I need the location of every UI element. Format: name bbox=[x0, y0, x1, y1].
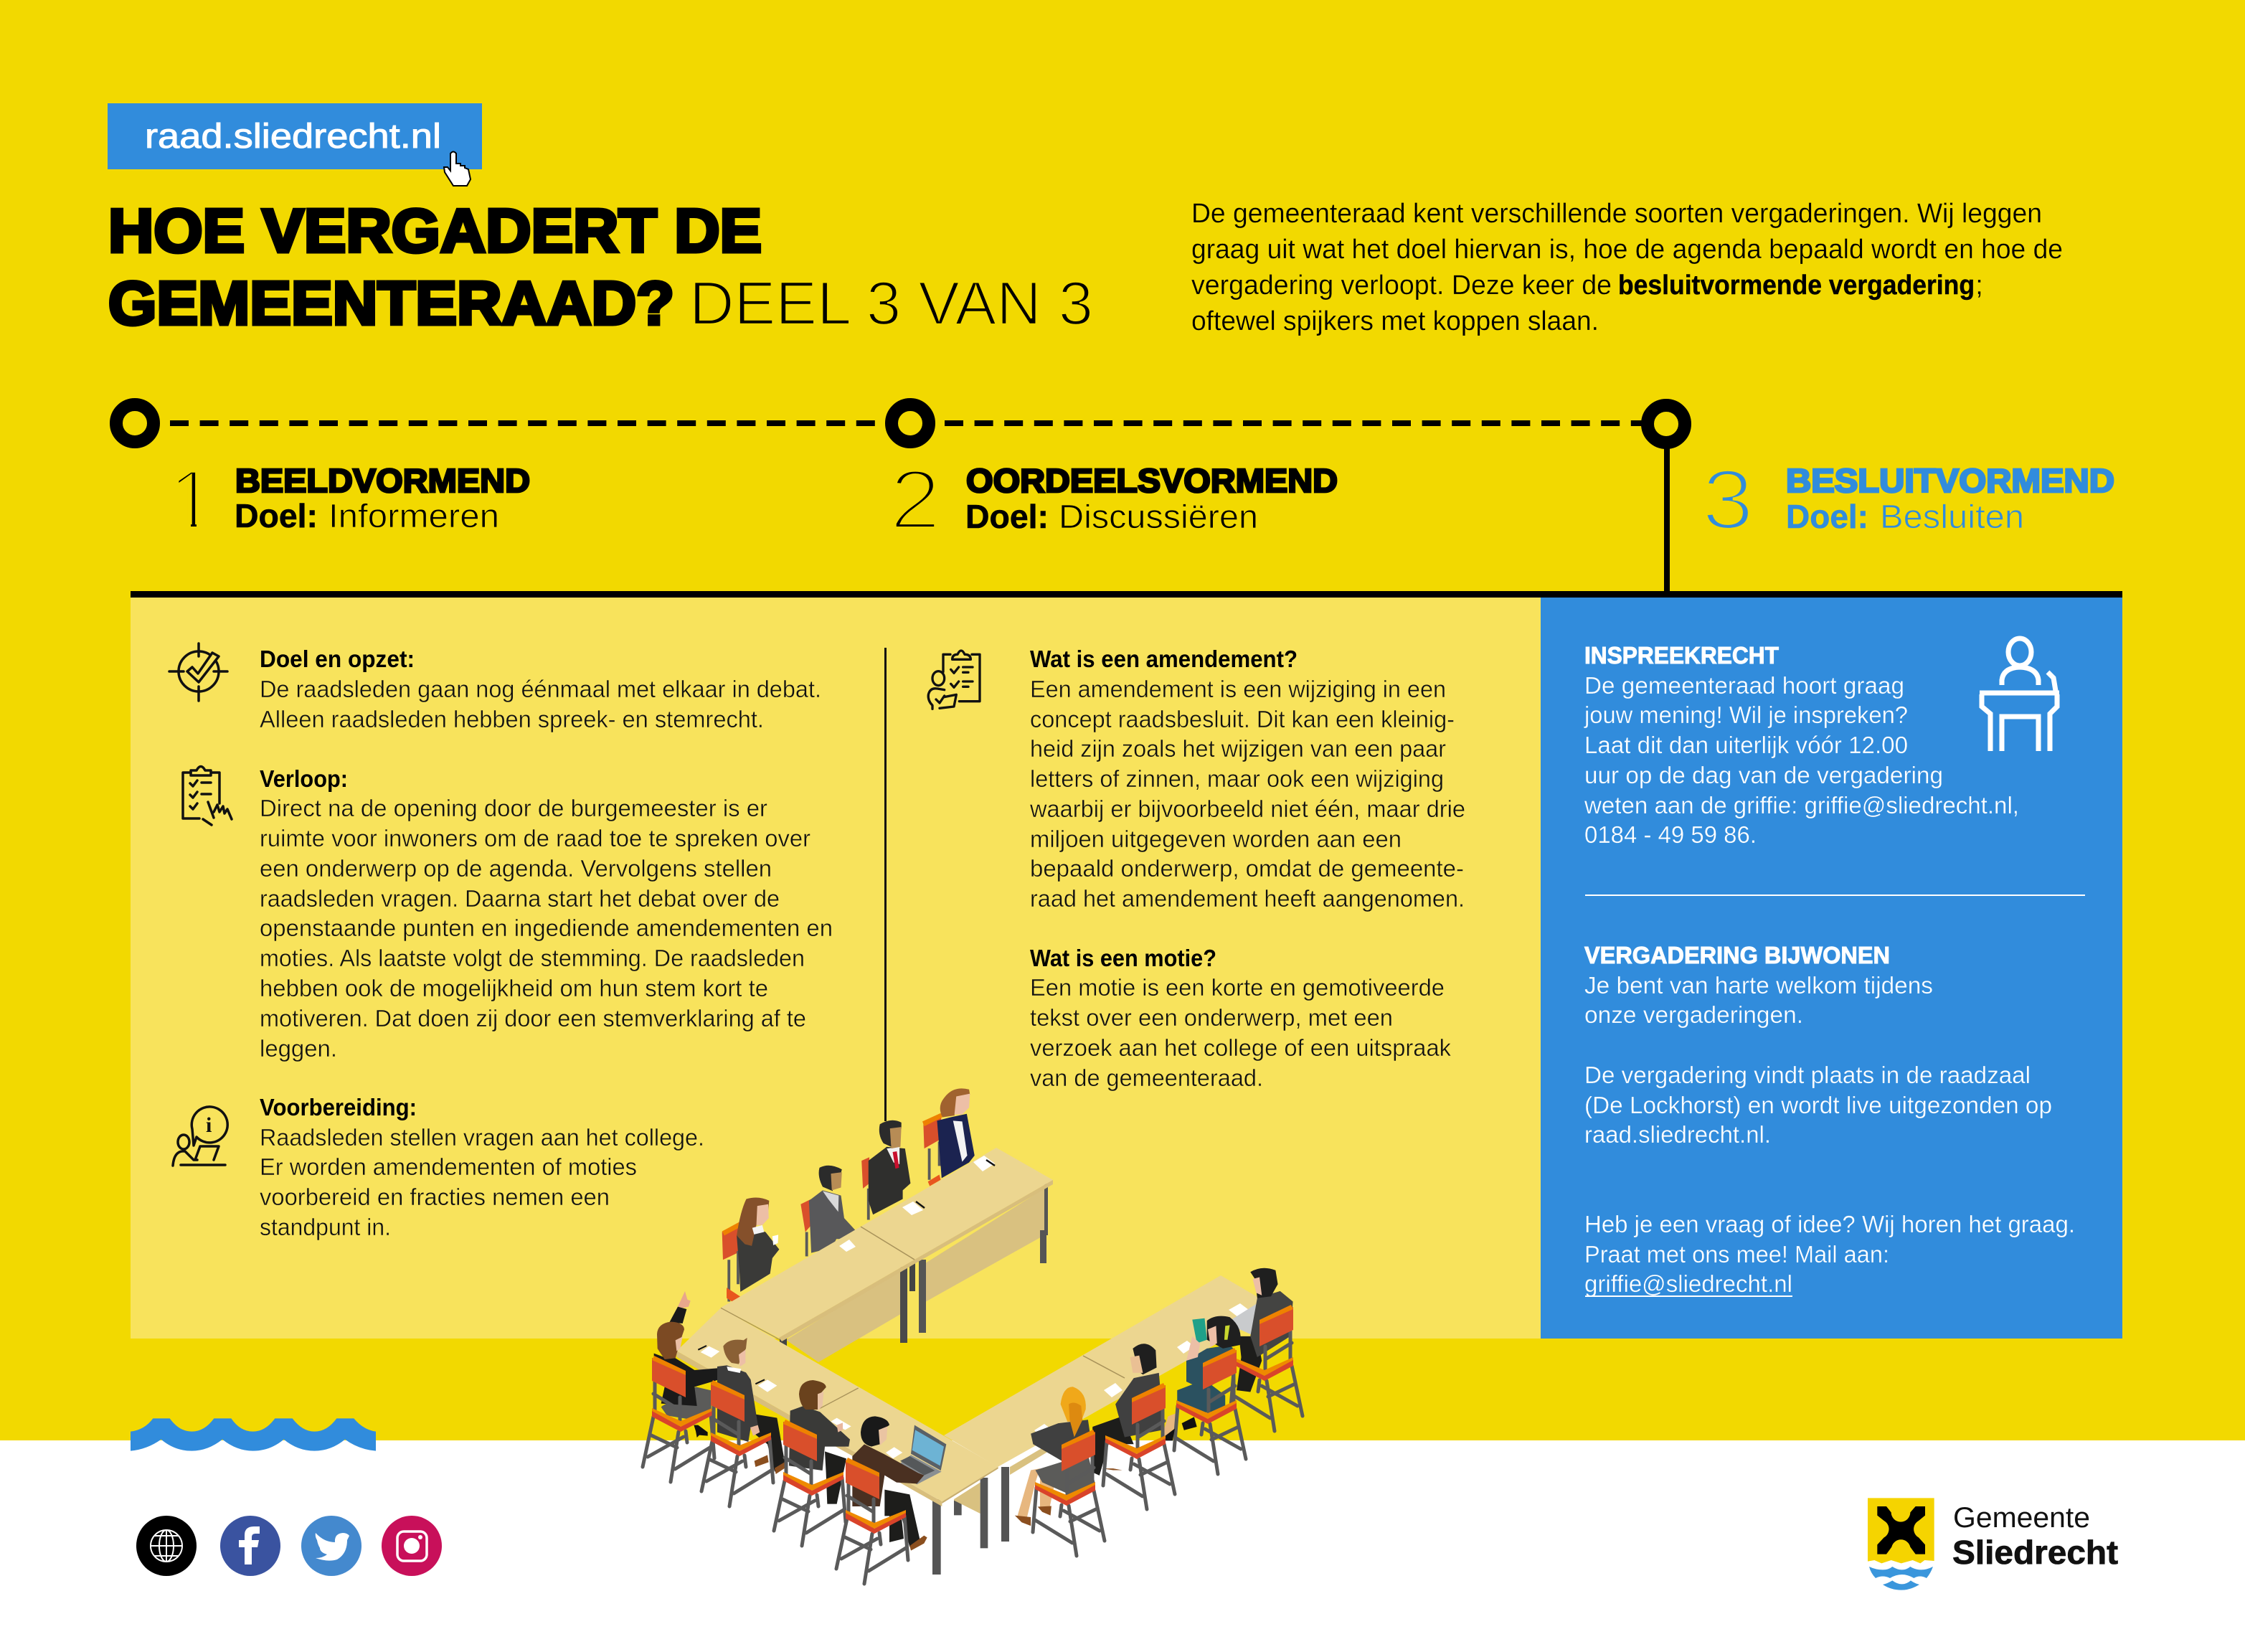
text block: voorbereiding bbox=[260, 1094, 704, 1240]
step 3 label: Besluiten bbox=[1880, 498, 2024, 535]
left person 4 with laptop bbox=[852, 1416, 927, 1551]
text block: inspreekrecht bbox=[1584, 642, 2019, 848]
text block: vergadering bijwonen: VERGADERING BIJWONEN bbox=[1584, 942, 1890, 968]
right person black hair bbox=[1092, 1344, 1175, 1476]
text block: voorbereiding: Voorbereiding: bbox=[260, 1094, 417, 1120]
text block: motie: van de gemeenteraad. bbox=[1030, 1065, 1263, 1091]
icon: clipboard person bbox=[928, 651, 980, 709]
step 1 label: Informeren bbox=[329, 497, 499, 534]
step 1 label: Doel: bbox=[235, 497, 318, 534]
back tables bbox=[721, 1148, 1053, 1362]
logo wordmark: Gemeente bbox=[1953, 1502, 2090, 1534]
left table bbox=[676, 1308, 998, 1575]
logo wordmark: Sliedrecht bbox=[1952, 1534, 2118, 1571]
icon: website bbox=[136, 1516, 197, 1576]
step 3 label: Doel: bbox=[1786, 498, 1868, 535]
left person 1 raised hand bbox=[654, 1291, 717, 1438]
text block: verloop bbox=[260, 765, 833, 1062]
text block: verloop: een onderwerp op de agenda. Vervolgens stellen bbox=[260, 855, 772, 882]
text block: motie bbox=[1030, 945, 1451, 1091]
intro text: De gemeenteraad kent verschillende soorten vergaderingen. Wij leggen bbox=[1191, 199, 2042, 229]
intro text: ; bbox=[1975, 270, 1983, 301]
text block: vergadering bijwonen bbox=[1584, 942, 2052, 1148]
text block: inspreekrecht: Laat dit dan uiterlijk vóór 12.00 bbox=[1584, 732, 1908, 758]
right person teal bbox=[1161, 1316, 1241, 1439]
chair and person 3 bbox=[861, 1120, 910, 1220]
text block: contact bbox=[1584, 1211, 2075, 1297]
text block: contact: Heb je een vraag of idee? Wij horen het graag. bbox=[1584, 1211, 2075, 1237]
chair right 4 bbox=[1231, 1305, 1303, 1431]
text block: amendement: concept raadsbesluit. Dit kan een kleinig- bbox=[1030, 706, 1455, 732]
chair right 3 bbox=[1174, 1348, 1246, 1474]
text block: voorbereiding: voorbereid en fracties nemen een bbox=[260, 1184, 610, 1210]
intro text bbox=[1191, 199, 2063, 336]
text block: contact: Praat met ons mee! Mail aan: bbox=[1584, 1241, 1889, 1268]
text block: verloop: Verloop: bbox=[260, 765, 348, 792]
text block: amendement: heid zijn zoals het wijzigen van een paar bbox=[1030, 735, 1446, 762]
icon: hand cursor bbox=[444, 152, 471, 186]
text block: vergadering bijwonen: raad.sliedrecht.nl. bbox=[1584, 1121, 1771, 1148]
step 1 label: BEELDVORMEND bbox=[235, 462, 530, 499]
text block: vergadering bijwonen: De vergadering vindt plaats in de raadzaal bbox=[1584, 1062, 2031, 1088]
text block: vergadering bijwonen: Je bent van harte welkom tijdens bbox=[1584, 972, 1933, 999]
text block: verloop: Direct na de opening door de burgemeester is er bbox=[260, 795, 767, 821]
text block: doel en opzet: Alleen raadsleden hebben spreek- en stemrecht. bbox=[260, 706, 764, 732]
title bbox=[108, 197, 1093, 338]
text block: amendement: raad het amendement heeft aangenomen. bbox=[1030, 885, 1465, 912]
intro text: besluitvormende vergadering bbox=[1618, 270, 1975, 301]
logo shield bbox=[1868, 1498, 1934, 1590]
text block: inspreekrecht: INSPREEKRECHT bbox=[1584, 642, 1779, 669]
step 2 label: Discussiëren bbox=[1059, 498, 1258, 535]
step 2 label: 2 bbox=[889, 453, 941, 547]
title: DEEL 3 VAN 3 bbox=[689, 270, 1093, 338]
text block: verloop: moties. Als laatste volgt de stemming. De raadsleden bbox=[260, 945, 805, 971]
icon: info person laptop: i bbox=[206, 1113, 212, 1137]
step 1 label bbox=[169, 453, 530, 547]
text block: inspreekrecht: jouw mening! Wil je inspreken? bbox=[1584, 702, 1908, 728]
text block: inspreekrecht: De gemeenteraad hoort graag bbox=[1584, 672, 1904, 699]
back row people and chairs bbox=[722, 1088, 975, 1303]
text block: motie: verzoek aan het college of een uitspraak bbox=[1030, 1034, 1451, 1061]
icon: twitter bbox=[301, 1516, 361, 1576]
icon: facebook bbox=[220, 1516, 280, 1576]
timeline bbox=[116, 405, 1685, 592]
text block: doel en opzet bbox=[260, 646, 821, 732]
chair and person 1 bbox=[722, 1198, 779, 1303]
chair right 2 bbox=[1103, 1383, 1175, 1509]
chair and person 2 bbox=[800, 1166, 857, 1256]
right person blonde bbox=[1015, 1387, 1095, 1526]
panel: blue sidebar bbox=[1541, 597, 2122, 1339]
step 3 label bbox=[1702, 453, 2114, 547]
text block: doel en opzet: Doel en opzet: bbox=[260, 646, 415, 672]
chair 1 bbox=[643, 1356, 714, 1482]
text block: amendement: waarbij er bijvoorbeeld niet één, maar drie bbox=[1029, 796, 1465, 822]
right table bbox=[944, 1275, 1278, 1542]
illustration: council meeting bbox=[643, 1088, 1303, 1584]
text block: motie: Wat is een motie? bbox=[1030, 945, 1216, 971]
intro text: graag uit wat het doel hiervan is, hoe de agenda bepaald wordt en hoe de bbox=[1191, 235, 2063, 265]
chair 4 bbox=[836, 1458, 908, 1584]
text block: amendement: Een amendement is een wijziging in een bbox=[1030, 676, 1446, 702]
url button bbox=[108, 103, 482, 169]
step 3 label: BESLUITVORMEND bbox=[1786, 462, 2114, 499]
text block: inspreekrecht: uur op de dag van de vergadering bbox=[1584, 762, 1943, 788]
left person 2 bbox=[717, 1338, 787, 1474]
step 2 label bbox=[889, 453, 1338, 547]
column divider bbox=[884, 648, 887, 1121]
step 1 label: 1 bbox=[169, 453, 216, 547]
text block: inspreekrecht: 0184 - 49 59 86. bbox=[1584, 821, 1757, 848]
text block: motie: tekst over een onderwerp, met een bbox=[1030, 1004, 1393, 1031]
text block: amendement: miljoen uitgegeven worden aan een bbox=[1030, 826, 1402, 852]
intro text: oftewel spijkers met koppen slaan. bbox=[1191, 306, 1599, 336]
text block: verloop: motiveren. Dat doen zij door een stemverklaring af te bbox=[260, 1005, 806, 1032]
chair right 1 bbox=[1033, 1430, 1105, 1556]
text block: contact: griffie@sliedrecht.nl bbox=[1584, 1270, 1792, 1297]
text block: voorbereiding: Er worden amendementen of moties bbox=[260, 1153, 637, 1180]
text block: amendement: Wat is een amendement? bbox=[1030, 646, 1298, 672]
black rule bbox=[131, 591, 2122, 598]
right person far bbox=[1230, 1268, 1293, 1392]
step 3 label: 3 bbox=[1702, 453, 1754, 547]
text block: verloop: ruimte voor inwoners om de raad toe te spreken over bbox=[260, 825, 810, 851]
text block: motie: Een motie is een korte en gemotiveerde bbox=[1030, 974, 1445, 1001]
icon: instagram bbox=[382, 1516, 442, 1576]
url button: raad.sliedrecht.nl bbox=[145, 118, 441, 156]
left person 3 bbox=[789, 1380, 850, 1504]
text block: vergadering bijwonen: onze vergaderingen. bbox=[1584, 1001, 1803, 1028]
panel: light yellow content bbox=[131, 597, 1541, 1339]
text block: verloop: hebben ook de mogelijkheid om hun stem kort te bbox=[260, 975, 768, 1001]
text block: amendement bbox=[1029, 646, 1465, 912]
chair 3 bbox=[774, 1420, 846, 1546]
wave decoration bbox=[131, 1418, 376, 1451]
text block: doel en opzet: De raadsleden gaan nog éénmaal met elkaar in debat. bbox=[260, 676, 821, 702]
logo wordmark bbox=[1952, 1502, 2118, 1571]
logo: gemeente sliedrecht bbox=[1868, 1498, 2118, 1590]
text block: verloop: openstaande punten en ingediende amendementen en bbox=[260, 915, 833, 941]
icon: clipboard hand bbox=[183, 766, 232, 825]
chair 2 bbox=[701, 1380, 773, 1506]
intro text: vergadering verloopt. Deze keer de bbox=[1191, 270, 1612, 301]
text block: vergadering bijwonen: (De Lockhorst) en wordt live uitgezonden op bbox=[1584, 1092, 2052, 1118]
text block: amendement: bepaald onderwerp, omdat de gemeente- bbox=[1030, 855, 1464, 882]
chair and person 4 bbox=[922, 1088, 975, 1186]
text block: verloop: raadsleden vragen. Daarna start het debat over de bbox=[260, 885, 780, 912]
step 2 label: OORDEELSVORMEND bbox=[966, 462, 1338, 499]
text block: amendement: letters of zinnen, maar ook een wijziging bbox=[1030, 765, 1444, 792]
title: GEMEENTERAAD? bbox=[108, 270, 674, 338]
text block: inspreekrecht: weten aan de griffie: griffie@sliedrecht.nl, bbox=[1584, 792, 2019, 818]
text block: voorbereiding: Raadsleden stellen vragen aan het college. bbox=[260, 1124, 704, 1151]
icon: target check bbox=[169, 643, 227, 701]
sidebar divider bbox=[1585, 895, 2085, 896]
text block: voorbereiding: standpunt in. bbox=[260, 1214, 391, 1240]
text block: verloop: leggen. bbox=[260, 1035, 337, 1062]
title: HOE VERGADERT DE bbox=[108, 197, 762, 265]
icon: speaker at lectern bbox=[1980, 638, 2059, 751]
step 2 label: Doel: bbox=[965, 498, 1049, 535]
icon: info person laptop bbox=[173, 1107, 227, 1166]
